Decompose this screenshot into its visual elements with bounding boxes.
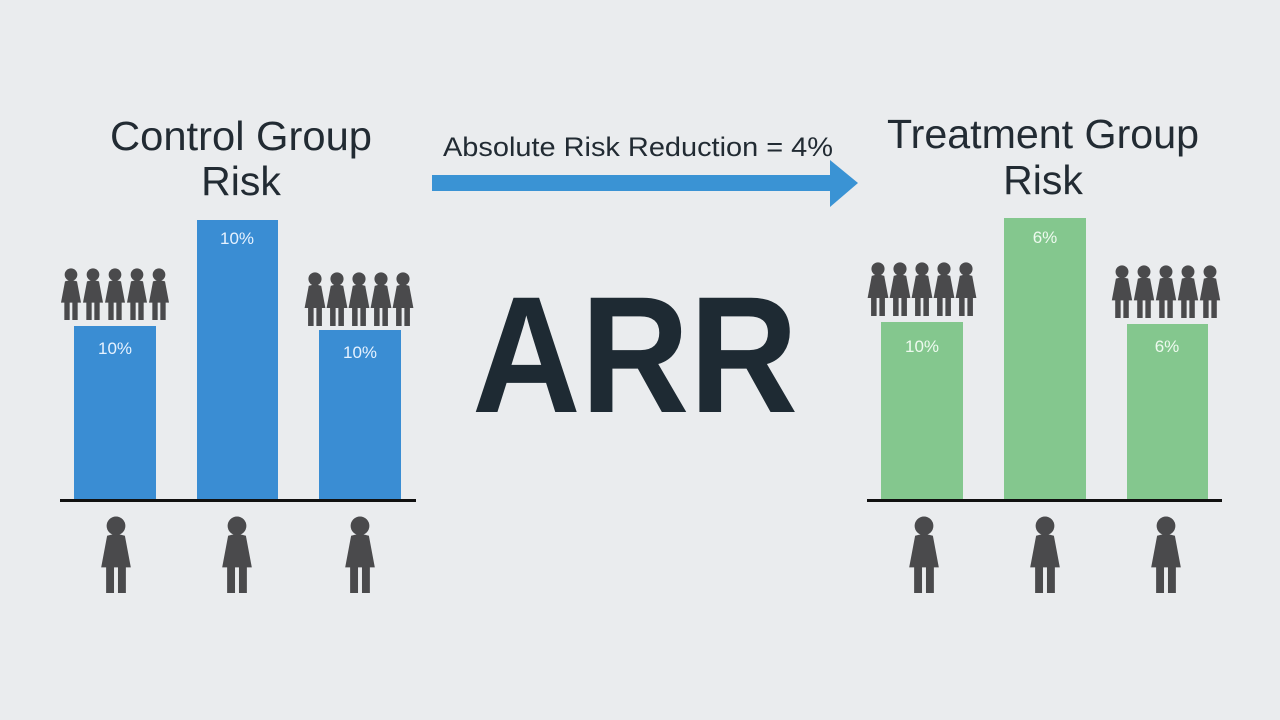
people below bars (101, 516, 375, 593)
bar 1: 10% (905, 337, 939, 356)
people row right (1112, 265, 1220, 318)
people below bars (909, 516, 1181, 593)
title: control group risk: Risk (201, 158, 281, 204)
bar 2: 6% (1033, 228, 1057, 247)
chart: control group (60, 220, 416, 593)
bar 3: 6% (1155, 337, 1179, 356)
title: control group risk (110, 113, 372, 204)
title: treatment group risk (887, 111, 1199, 203)
title: control group risk: Control Group (110, 113, 372, 159)
bar 1 (74, 326, 156, 499)
chart: treatment group (867, 218, 1222, 593)
people row left (61, 268, 169, 320)
bar 2 (197, 220, 278, 499)
arrow (432, 160, 858, 207)
bar 1 (881, 322, 963, 499)
arrow label: Absolute Risk Reduction = 4% (443, 132, 833, 162)
people row right (305, 272, 413, 326)
bar 3 (1127, 324, 1208, 499)
ARR big text: ARR (472, 263, 798, 448)
people row left (868, 262, 976, 316)
title: treatment group risk: Risk (1003, 157, 1083, 203)
bar 3 (319, 330, 401, 499)
bar 2: 10% (220, 229, 254, 248)
bar 2 (1004, 218, 1086, 499)
title: treatment group risk: Treatment Group (887, 111, 1199, 157)
bar 1: 10% (98, 339, 132, 358)
bar 3: 10% (343, 343, 377, 362)
